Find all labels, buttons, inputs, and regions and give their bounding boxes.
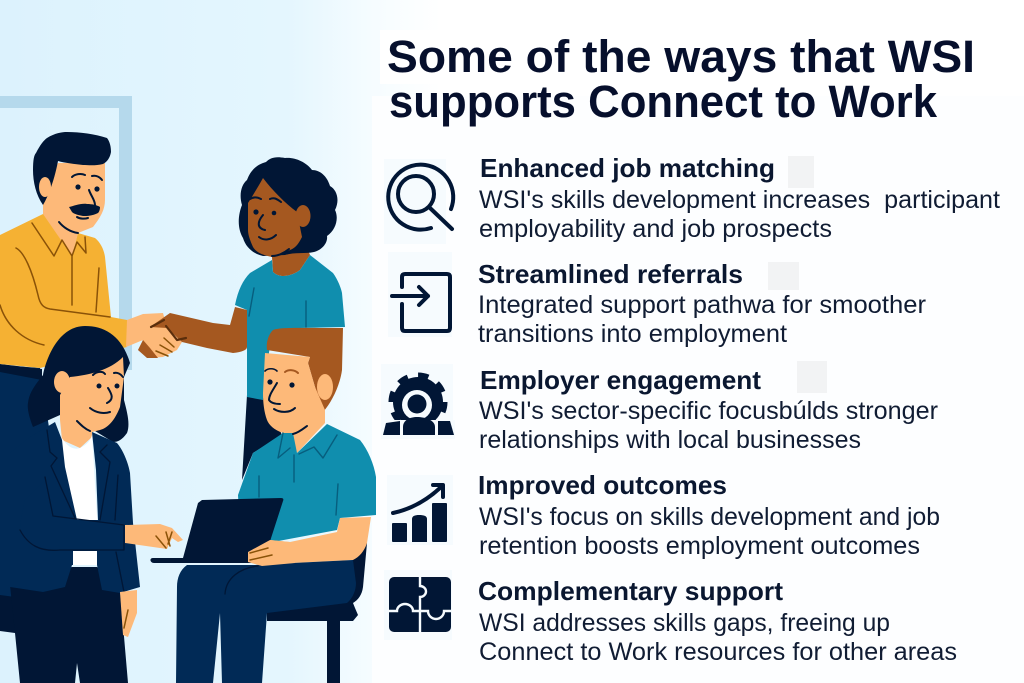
description: [479, 609, 957, 666]
icon: growth bar chart: [387, 475, 453, 545]
hair: [28, 326, 130, 442]
pointing hand: [125, 524, 183, 549]
laptop: [150, 498, 283, 563]
lower hand: [120, 590, 137, 637]
icon: gear with people: [381, 364, 455, 439]
trousers: [10, 567, 128, 683]
list item: Streamlined referrals: [388, 252, 926, 348]
arm: [248, 517, 371, 565]
white shirt: [62, 435, 100, 565]
description: WSI's focus on skills development and job: [479, 503, 940, 531]
description: [479, 503, 940, 560]
list item: Employer engagement: [381, 361, 938, 454]
shirt hem: [73, 551, 97, 565]
heading: Streamlined referrals: [478, 259, 743, 289]
hair: [267, 328, 343, 412]
description: relationships with local businesses: [479, 426, 861, 454]
description: [478, 291, 926, 348]
neck and face: [263, 353, 325, 453]
description: Connect to Work resources for other areas: [479, 638, 957, 666]
title: Some of the ways that WSI: [387, 31, 975, 82]
heading: Improved outcomes: [478, 470, 727, 500]
person: woman in teal shirt: [235, 157, 345, 480]
description: [479, 397, 938, 454]
handshake: [126, 307, 247, 358]
description: Integrated support pathwa for smoother: [478, 291, 926, 319]
person: seated man with laptop: [150, 328, 376, 683]
illustration: team of four people: [0, 96, 376, 683]
title: supports Connect to Work: [389, 76, 938, 127]
shirt: [238, 424, 376, 542]
icon: arrow into box: [388, 252, 452, 337]
heading: Enhanced job matching: [480, 153, 775, 183]
heading: Complementary support: [478, 576, 783, 606]
window frame: [0, 96, 132, 370]
description: retention boosts employment outcomes: [479, 532, 920, 560]
description: transitions into employment: [478, 320, 787, 348]
person: man in yellow shirt: [0, 132, 127, 633]
description: [479, 186, 1000, 243]
heading: Employer engagement: [480, 365, 761, 395]
icon: magnifier in ring: [384, 159, 453, 244]
description: WSI addresses skills gaps, freeing up: [479, 609, 890, 637]
person: woman in navy blazer: [10, 326, 183, 683]
icon: puzzle pieces: [384, 570, 452, 640]
legs: [176, 560, 356, 683]
chair: [267, 543, 367, 683]
blazer: [10, 422, 140, 593]
list item: Improved outcomes: [387, 470, 940, 560]
list item: Complementary support: [384, 570, 957, 666]
description: WSI's sector-specific focusbúlds stronger: [479, 397, 938, 425]
description: employability and job prospects: [479, 215, 832, 243]
list item: Enhanced job matching: [384, 153, 1000, 244]
neck and face: [60, 357, 124, 448]
description: WSI's skills development increases participant: [479, 186, 1000, 214]
title: [380, 30, 980, 127]
